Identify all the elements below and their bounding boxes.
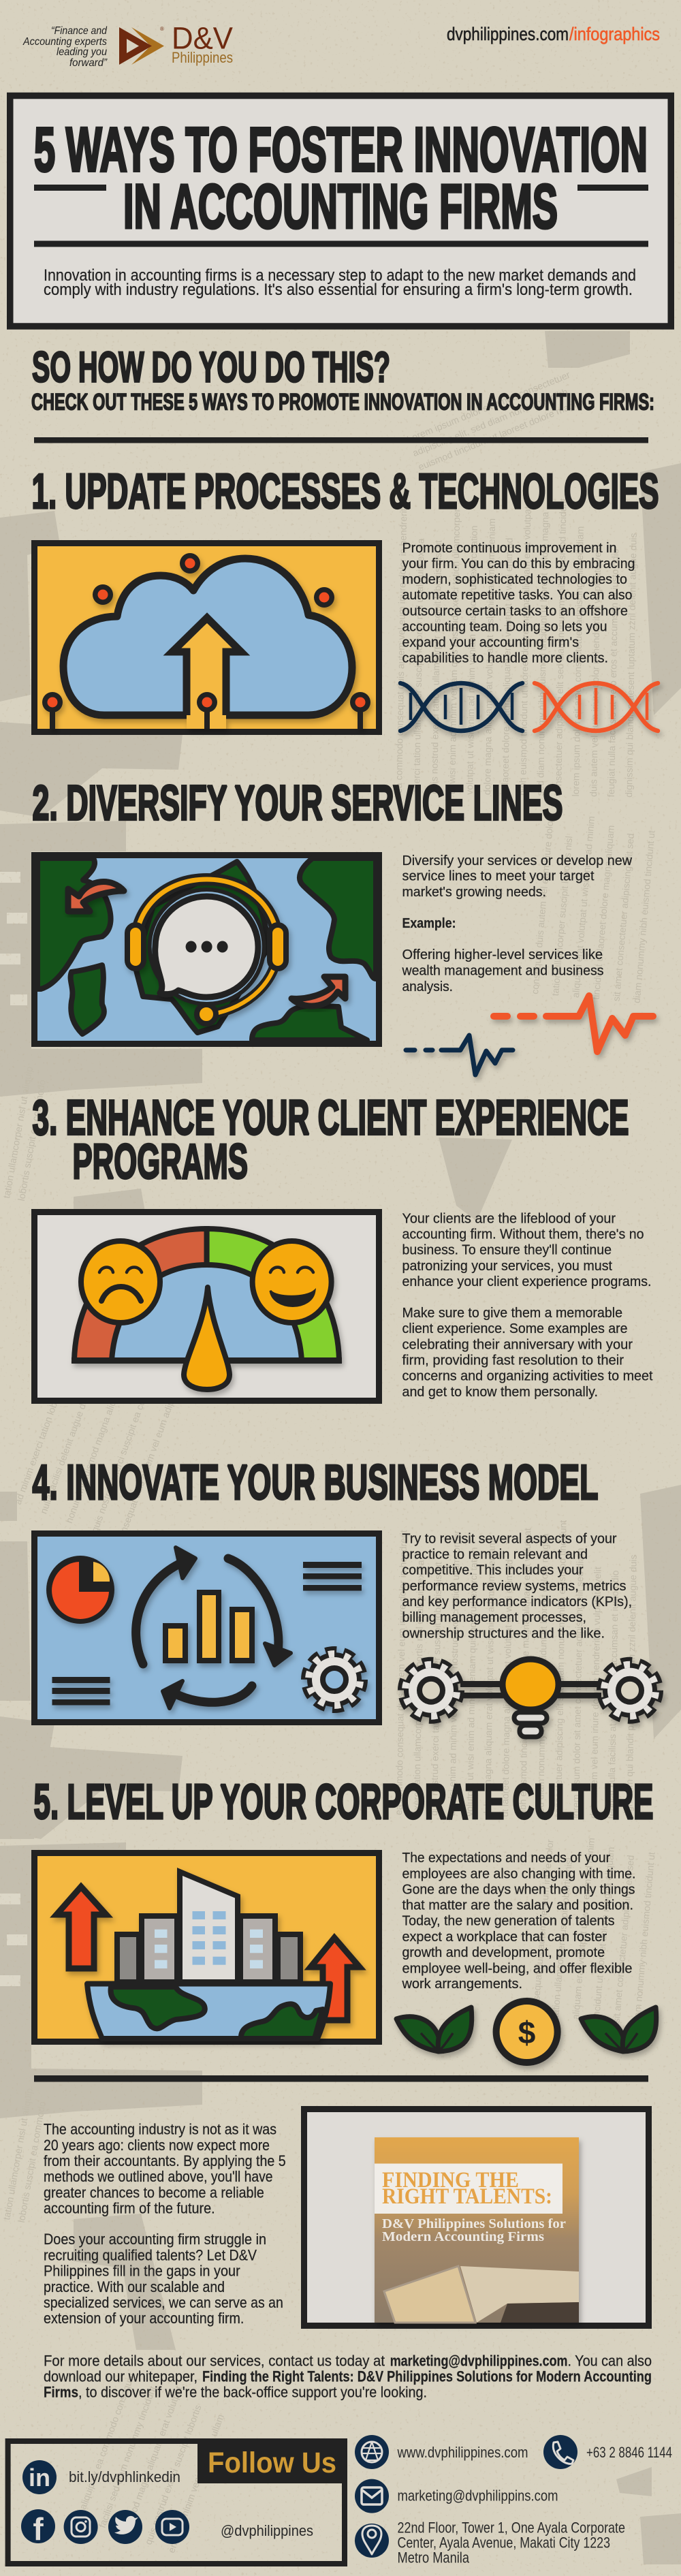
whitepaper cover: D&V Philippines Solutions for <box>382 2217 566 2231</box>
paper background with newspaper collage: aliquam erat volutpat ut wisi enim ad minim <box>570 1837 597 2020</box>
text: call to action: download our whitepaper, <box>44 2368 197 2385</box>
paper background with newspaper collage: tation ullamcorper nisl ut aliquip <box>1 2087 35 2221</box>
whitepaper cover: Modern Accounting Firms <box>382 2230 544 2244</box>
text: section 1: Promote continuous improvement in <box>402 541 617 556</box>
paper background with newspaper collage: dignissim qui blandit praesent luptatum zzril delenit augue duis <box>623 1554 639 1819</box>
paper background with newspaper collage: duis autem vel eum iriure dolor in hendrerit in vulputate velit <box>588 545 603 797</box>
text: call to action: Firms <box>44 2384 78 2401</box>
paper background with newspaper collage: nibh euismod tincidunt ut laoreet dolore magna aliquam erat volutpat <box>517 506 533 796</box>
paper background with newspaper collage: euismod tincidunt ut laoreet dolore magna <box>417 396 586 473</box>
paper background with newspaper collage: volutpat ut wisi enim ad minim veniam quis nostrud exerci tation <box>464 525 479 795</box>
icon: bulb with gears <box>402 1659 659 1737</box>
panel: follow us <box>8 2438 347 2564</box>
text: section 3: Make sure to give them a memorable <box>402 1306 622 1321</box>
paper background with newspaper collage: tation ullamcorper suscipit lobortis nisl <box>550 1857 574 2018</box>
text: section 3: patronizing your services, you must <box>402 1259 612 1274</box>
paper background with newspaper collage: nibh euismod tincidunt ut laoreet dolore magna aliquam erat volutpat <box>517 1528 533 1817</box>
paper background with newspaper collage: quis nostrud exerci suscipit ea commodo <box>89 1368 158 1534</box>
panel: section 2 headset on map <box>34 855 379 1043</box>
text: section 3: enhance your client experience programs. <box>402 1274 651 1289</box>
icon: facebook <box>21 2509 55 2547</box>
text: section 5: work arrangements. <box>402 1977 522 1992</box>
text: section 4: ownership structures and the like. <box>402 1627 605 1642</box>
paper background with newspaper collage: ea commodo consequat duis autem vel eum iriure dolor in hendrerit <box>393 1530 409 1815</box>
paper background with newspaper collage: exerci tation ullamcorper suscipit lobortis nisl ut aliquip ex ea <box>411 538 426 794</box>
email text: marketing@dvphilippins.com <box>398 2487 558 2504</box>
text: section 5: The expectations and needs of your <box>402 1851 610 1866</box>
text: section 1: expand your accounting firm's <box>402 635 579 650</box>
paper background with newspaper collage: consequat duis autem vel eum iriure dolor <box>529 817 556 994</box>
header: D&V Philippines logo <box>119 20 233 66</box>
subheading: SO HOW DO YOU DO THIS? <box>32 343 390 391</box>
text: section 2: market's growing needs. <box>402 885 546 900</box>
text: conclusion: 20 years ago: clients now expect more <box>44 2137 270 2154</box>
paper background with newspaper collage: euismod magna aliquam erat volutpat <box>119 2385 184 2538</box>
paper background with newspaper collage: quis nostrud exerci tation ullamcorper suscipit lobortis nisl ut <box>428 540 443 794</box>
chart: pie <box>46 1556 114 1624</box>
text: section 2: wealth management and business <box>402 964 603 979</box>
paper background with newspaper collage: nulla facilisi delenit augue duis dolore <box>37 1363 102 1515</box>
paper background with newspaper collage: nonummy euismod magna aliquam ut wisi <box>63 1354 134 1524</box>
paper background with newspaper collage: ut laoreet dolore magna aliquam erat volutpat ut wisi enim ad <box>499 537 515 796</box>
subheading <box>31 343 654 443</box>
paper background with newspaper collage: tincidunt ut laoreet dolore magna aliquam <box>590 1847 616 2022</box>
text: section 4: and key performance indicators (KPIs), <box>402 1595 632 1609</box>
paper background with newspaper collage: enim ad minim veniam tation ullam <box>165 2413 226 2554</box>
icon: linkedin <box>22 2460 57 2494</box>
paper background with newspaper collage: sit amet consectetuer adipiscing elit sed <box>611 833 636 1002</box>
text: section 5: employee well-being, and offer flexible <box>402 1962 632 1977</box>
text: section 2: Offering higher-level services like <box>402 947 603 962</box>
paper background with newspaper collage: lorem ipsum dolor sit amet consectetuer adipiscing elit sed diam <box>570 527 586 797</box>
icon: linkedin: in <box>29 2464 50 2492</box>
panel: section 5 buildings on globe <box>34 1853 379 2042</box>
paper background with newspaper collage: diam nonummy nibh euismod tincidunt ut <box>631 1851 657 2025</box>
header: company tagline <box>22 25 108 69</box>
header: website url: /infographics <box>569 24 660 44</box>
panel: whitepaper cover <box>304 2109 648 2325</box>
icon: navy DNA helix <box>400 683 522 731</box>
icon: text lines left <box>52 1677 110 1706</box>
text: conclusion: Does your accounting firm struggle in <box>44 2231 266 2248</box>
text: section 1: automate repetitive tasks. You can also <box>402 588 632 603</box>
icon: location <box>355 2524 389 2558</box>
icon: instagram <box>64 2510 98 2544</box>
text: section 3: Your clients are the lifeblood of your <box>402 1212 616 1227</box>
intro text <box>44 266 636 299</box>
follow us tab: Follow Us <box>208 2447 336 2479</box>
text: conclusion: accounting firm of the future. <box>44 2200 215 2217</box>
text: call to action: For more details about our services, contact us today at <box>44 2353 385 2369</box>
paper background with newspaper collage: aliquam erat volutpat ut wisi enim ad minim <box>570 815 597 998</box>
intro text: comply with industry regulations. It's also essential for ensuring a firm's long-term growth. <box>44 281 633 299</box>
text: conclusion: Philippines fill in the gaps in your <box>44 2263 240 2280</box>
paper background with newspaper collage: ut laoreet dolore magna aliquam erat volutpat ut wisi enim ad <box>499 1559 515 1817</box>
address text: 22nd Floor, Tower 1, One Ayala Corporate <box>398 2519 625 2536</box>
text: section 4: performance review systems, metrics <box>402 1579 627 1594</box>
header: D&V Philippines logo: ® <box>160 26 164 32</box>
paper background with newspaper collage: lorem ipsum dolor sit amet consectetuer adipiscing elit sed diam <box>570 1548 586 1819</box>
icon: text lines right <box>303 1562 362 1591</box>
icon: orange DNA helix <box>535 683 658 731</box>
social handle: @dvphilippines <box>221 2522 313 2539</box>
website text: www.dvphilippines.com <box>397 2444 528 2461</box>
paper background with newspaper collage: lobortis suscipit ea commodo <box>16 1079 48 1201</box>
text: conclusion: specialized services, we can serve as an <box>44 2294 283 2311</box>
icon: facebook: f <box>33 2511 44 2547</box>
paper background with newspaper collage: consequat duis autem vel eum iriure dolor <box>529 1839 556 2016</box>
paper background with newspaper collage: consequat duis autem vel eum adipiscing <box>114 1376 185 1543</box>
icon: happy face <box>253 1241 332 1323</box>
gauge needle <box>184 1287 229 1389</box>
header: company tagline: “Finance and <box>51 25 108 37</box>
arrow: right up <box>311 1938 360 2020</box>
panel: section 3 satisfaction gauge <box>34 1212 379 1400</box>
text: section 5: Today, the new generation of talents <box>402 1914 614 1929</box>
text: section 3 <box>402 1212 653 1400</box>
arrows: cycle <box>136 1548 291 1708</box>
icon: buildings <box>117 1872 300 1982</box>
icon: cloud with upload arrow <box>42 553 370 729</box>
paper background with newspaper collage: quis nostrud exerci tation ullamcorper suscipit lobortis nisl ut <box>428 1562 443 1816</box>
text: section 3: firm, providing fast resolution to their <box>402 1353 624 1368</box>
paper background with newspaper collage: duis autem vel eum iriure dolor in hendrerit in vulputate velit <box>588 1567 603 1819</box>
text: call to action: . You can also <box>568 2353 652 2369</box>
icon: email <box>355 2479 389 2513</box>
text: section 1 <box>402 541 635 666</box>
text: call to action: , to discover if we're the back-office support you're looking. <box>78 2384 427 2401</box>
text: section 3: accounting firm. Without them, there's no <box>402 1227 644 1242</box>
paper background with newspaper collage: diam nonummy nibh euismod tincidunt ut <box>631 830 657 1003</box>
icon: half globe <box>87 1983 330 2039</box>
arrow: bottom right <box>291 977 345 1006</box>
address text <box>398 2519 625 2566</box>
text: section 2: analysis. <box>402 979 453 994</box>
text: conclusion: The accounting industry is not as it was <box>44 2121 276 2138</box>
address text: Center, Ayala Avenue, Makati City 1223 <box>398 2534 610 2551</box>
map landmasses <box>37 858 376 1040</box>
title <box>34 115 648 247</box>
icon: dollar coin <box>496 2001 558 2062</box>
arrow: top left <box>68 882 124 911</box>
icon: sad face <box>81 1241 160 1323</box>
heading: section 3 <box>33 1091 629 1189</box>
text: section 3: and get to know them personally. <box>402 1385 598 1400</box>
icon: leaves right <box>581 2007 656 2052</box>
paper background with newspaper collage: adipiscing elit, sed diam nonummy nibh <box>411 386 569 458</box>
text: section 1: modern, sophisticated technologies to <box>402 572 627 587</box>
whitepaper cover: RIGHT TALENTS: <box>382 2184 552 2209</box>
arrow: left up <box>57 1887 106 1968</box>
icon: website <box>355 2435 389 2469</box>
paper background with newspaper collage: tincidunt ut laoreet dolore magna aliquam <box>590 825 616 1000</box>
header: company tagline: Accounting experts <box>22 36 107 48</box>
chart: bars <box>165 1592 252 1661</box>
paper background with newspaper collage: ut wisi enim ad minim veniam quis nostrud exerci tation ullamcorper <box>446 508 462 794</box>
text: section 5: expect a workplace that can foster <box>402 1930 607 1945</box>
paper background with newspaper collage: ad minim exerci tation lobortis commodo <box>12 1342 81 1506</box>
text: conclusion: extension of your accounting firm. <box>44 2310 244 2327</box>
paper background with newspaper collage: volutpat ut wisi enim ad minim veniam quis nostrud exerci tation <box>464 1547 479 1817</box>
paper background with newspaper collage: ut wisi enim ad minim veniam quis nostrud exerci tation ullamcorper <box>446 1530 462 1816</box>
text: section 3: concerns and organizing activities to meet <box>402 1369 653 1384</box>
text: call to action <box>44 2353 652 2401</box>
text: section 2: service lines to meet your target <box>402 869 595 884</box>
icon: headset with chat bubble <box>127 879 286 1024</box>
text: section 2: Example: <box>402 916 456 931</box>
panel: section 1 cloud upload <box>34 544 379 732</box>
paper background with newspaper collage: dolore magna aliquam erat volutpat ut wisi enim ad minim veniam <box>481 1540 497 1817</box>
heading: section 3: PROGRAMS <box>72 1135 248 1189</box>
text: section 5: growth and development, promote <box>402 1945 605 1960</box>
text: section 2: Diversify your services or develop new <box>402 853 633 868</box>
title panel <box>10 95 671 326</box>
icon: navy pulse line <box>406 1035 513 1075</box>
text: section 3: client experience. Some examples are <box>402 1321 628 1336</box>
text: conclusion: practice. With our scalable and <box>44 2278 225 2295</box>
address text: Metro Manila <box>398 2549 470 2566</box>
paper background with newspaper collage: consectetuer adipiscing elit sed diam nonummy nibh euismod tincidunt <box>552 498 569 796</box>
header: D&V Philippines logo: Philippines <box>172 49 233 66</box>
header: company tagline: forward” <box>69 57 108 69</box>
whitepaper cover: FINDING THE <box>382 2168 519 2193</box>
icon: dollar coin: $ <box>518 2015 535 2050</box>
paper background with newspaper collage: dignissim qui blandit praesent luptatum zzril delenit augue duis <box>623 533 639 798</box>
text: section 2 <box>402 853 633 994</box>
icon: gear <box>306 1651 363 1708</box>
paper background with newspaper collage: feugiat nulla facilisis at vero eros et accumsan et iusto odio <box>605 548 620 797</box>
icon: youtube <box>155 2510 189 2544</box>
paper background with newspaper collage: dolore magna aliquam erat volutpat ut wisi enim ad minim veniam <box>481 518 497 795</box>
paper background with newspaper collage: tation ullamcorper suscipit lobortis nisl <box>550 836 574 996</box>
paper background with newspaper collage: sit amet consectetuer adipiscing elit sed <box>611 1855 636 2024</box>
text: conclusion: from their accountants. By applying the 5 <box>44 2152 286 2169</box>
follow us tab <box>197 2438 347 2483</box>
chart: satisfaction gauge <box>72 1229 342 1389</box>
text: conclusion <box>44 2121 286 2327</box>
header: company tagline: leading you <box>57 46 107 58</box>
icon: orange pulse line <box>494 996 653 1052</box>
paper background with newspaper collage: feugiat nulla facilisis at vero eros et accumsan et iusto odio <box>605 1570 620 1819</box>
text: section 3: business. To ensure they'll continue <box>402 1243 612 1258</box>
text: section 4: Try to revisit several aspects of your <box>402 1532 617 1547</box>
panel: section 4 business cycle <box>34 1534 379 1722</box>
paper background with newspaper collage: lobortis suscipit ea commodo <box>16 2101 48 2223</box>
icon: leaves left <box>396 2007 472 2052</box>
paper background with newspaper collage: exerci tation ullamcorper suscipit lobortis nisl ut aliquip ex ea <box>411 1560 426 1816</box>
text: section 5: that matter are the salary and position. <box>402 1898 633 1913</box>
text: conclusion: greater chances to become a reliable <box>44 2184 264 2201</box>
text: section 5: Gone are the days when the only things <box>402 1883 635 1898</box>
paper background with newspaper collage: sed diam nonummy nibh euismod tincidunt ut laoreet dolore magna <box>535 1533 550 1818</box>
text: section 5 <box>402 1851 636 1992</box>
text: section 1: accounting team. Doing so lets you <box>402 620 607 635</box>
text: section 4 <box>402 1532 632 1642</box>
text: section 4: billing management processes, <box>402 1610 586 1625</box>
text: section 3: celebrating their anniversary with your <box>402 1338 633 1353</box>
paper background with newspaper collage: ea commodo consequat duis autem vel eum iriure dolor in hendrerit <box>393 508 409 794</box>
paper background with newspaper collage: facilisi sed diam nonummy tincidunt <box>97 2385 158 2529</box>
text: conclusion: recruiting qualified talents? Let D&V <box>44 2246 257 2264</box>
text: section 4: competitive. This includes your <box>402 1563 584 1578</box>
icon: phone <box>543 2435 577 2469</box>
header: D&V Philippines logo: D&V <box>172 20 233 56</box>
header: website url <box>447 24 660 44</box>
text: section 4: practice to remain relevant and <box>402 1548 588 1562</box>
paper background with newspaper collage: ut aliquip ex ea commodo consequat <box>74 2371 137 2521</box>
text: section 1: capabilities to handle more clients. <box>402 651 608 666</box>
paper background with newspaper collage: quis nostrud exerci suscipit lobortis <box>142 2403 204 2546</box>
whitepaper cover <box>375 2137 579 2323</box>
paper background with newspaper collage: sed diam nonummy nibh euismod tincidunt ut laoreet dolore magna <box>535 512 550 796</box>
paper background with newspaper collage: consectetuer adipiscing elit sed diam nonummy nibh euismod tincidunt <box>552 1520 569 1818</box>
paper background with newspaper collage: tation ullamcorper nisl ut aliquip <box>1 1065 35 1199</box>
text: conclusion: methods we outlined above, you'll have <box>44 2168 272 2185</box>
linkedin url: bit.ly/dvphlinkedin <box>69 2468 180 2485</box>
header: website url: dvphilippines.com <box>447 24 569 44</box>
text: section 5: employees are also changing with time. <box>402 1867 636 1882</box>
text: section 1: outsource certain tasks to an offshore <box>402 604 628 619</box>
paper background with newspaper collage: Lorem ipsum dolor sit amet, consectetuer <box>405 369 572 445</box>
icon: circuit nodes <box>42 553 370 729</box>
icon: twitter <box>108 2510 142 2544</box>
text: call to action: marketing@dvphilippines.com <box>390 2353 568 2369</box>
text: section 1: your firm. You can do this by embracing <box>402 556 635 571</box>
